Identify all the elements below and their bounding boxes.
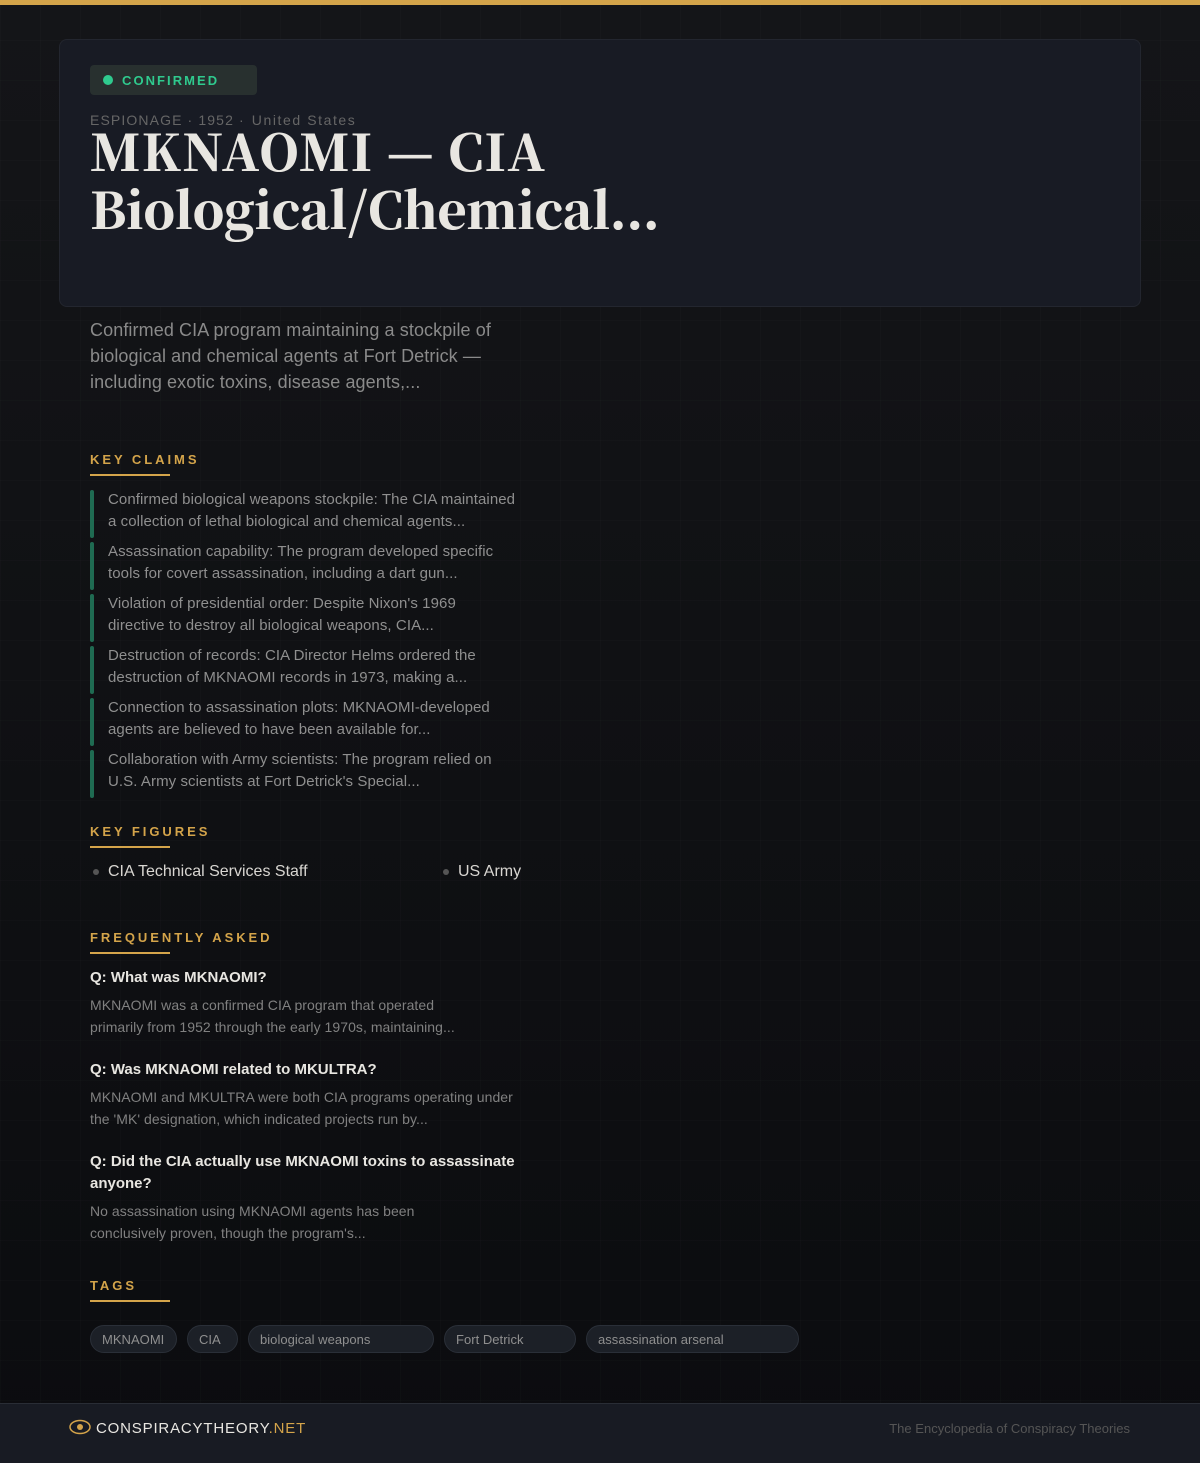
summary text: Confirmed CIA program maintaining a stockpile of [90, 320, 491, 340]
tag: CIA [187, 1325, 238, 1353]
faq 2 answer [90, 1089, 513, 1127]
category line: ESPIONAGE · 1952 · United States [90, 112, 356, 128]
faq 3 question: Q: Did the CIA actually use MKNAOMI toxins to assassinate [90, 1153, 515, 1170]
faq 2 answer: MKNAOMI and MKULTRA were both CIA programs operating under [90, 1089, 513, 1105]
summary text: including exotic toxins, disease agents,... [90, 372, 420, 392]
title: Biological/Chemical... [90, 172, 659, 244]
tag: Fort Detrick [444, 1325, 576, 1353]
claim 3 [90, 594, 456, 642]
faq 3 answer [90, 1203, 414, 1241]
claim 2 [90, 542, 493, 590]
tag: biological weapons: biological weapons [260, 1332, 370, 1347]
heading: key figures: KEY FIGURES [90, 824, 210, 839]
footer tagline: The Encyclopedia of Conspiracy Theories [889, 1421, 1130, 1436]
claim 4 [90, 646, 476, 694]
summary text [90, 320, 491, 392]
tag: MKNAOMI [90, 1325, 177, 1353]
badge: confirmed [90, 65, 257, 95]
tag: Fort Detrick: Fort Detrick [456, 1332, 524, 1347]
claim 6: Collaboration with Army scientists: The program relied on [108, 751, 492, 768]
tag: MKNAOMI: MKNAOMI [102, 1332, 164, 1347]
tag: biological weapons [248, 1325, 434, 1353]
panel: header card [59, 39, 1141, 307]
faq 1 answer: MKNAOMI was a confirmed CIA program that operated [90, 997, 434, 1013]
claim 5 [90, 698, 490, 746]
claim 1: Confirmed biological weapons stockpile: The CIA maintained [108, 491, 515, 508]
faq 3 answer: conclusively proven, though the program's... [90, 1225, 366, 1241]
claim 5: Connection to assassination plots: MKNAOMI-developed [108, 699, 490, 716]
claim 4: Destruction of records: CIA Director Helms ordered the [108, 647, 476, 664]
badge dot [103, 75, 113, 85]
top accent bar [0, 0, 1200, 5]
claim 5: agents are believed to have been available for... [108, 721, 430, 738]
title [90, 114, 659, 244]
faq 1 answer: primarily from 1952 through the early 1970s, maintaining... [90, 1019, 455, 1035]
claim 3: Violation of presidential order: Despite Nixon's 1969 [108, 595, 456, 612]
faq 1 question: Q: What was MKNAOMI? [90, 969, 267, 986]
claim 6 [90, 750, 492, 798]
faq 3 question [90, 1153, 515, 1192]
title: MKNAOMI — CIA [90, 114, 546, 186]
icon: eye logo [69, 1420, 91, 1434]
badge label: CONFIRMED [122, 73, 219, 88]
claim 6: U.S. Army scientists at Fort Detrick's Special... [108, 773, 420, 790]
heading: tags: TAGS [90, 1278, 137, 1293]
claim 4: destruction of MKNAOMI records in 1973, making a... [108, 669, 467, 686]
figure: CIA Technical Services Staff: CIA Technical Services Staff [108, 863, 308, 880]
faq 2 answer: the 'MK' designation, which indicated projects run by... [90, 1111, 428, 1127]
faq 2 question: Q: Was MKNAOMI related to MKULTRA? [90, 1061, 377, 1078]
tag: assassination arsenal [586, 1325, 799, 1353]
faq 1 answer [90, 997, 455, 1035]
claim 1 [90, 490, 515, 538]
claim 2: tools for covert assassination, including a dart gun... [108, 565, 458, 582]
figure: US Army: US Army [458, 863, 521, 880]
faq 3 question: anyone? [90, 1175, 152, 1192]
claim 2: Assassination capability: The program developed specific [108, 543, 493, 560]
tag: CIA: CIA [199, 1332, 221, 1347]
heading: key claims: KEY CLAIMS [90, 452, 199, 467]
claim 3: directive to destroy all biological weapons, CIA... [108, 617, 434, 634]
summary text: biological and chemical agents at Fort Detrick — [90, 346, 481, 366]
faq 3 answer: No assassination using MKNAOMI agents has been [90, 1203, 414, 1219]
logo wordmark: CONSPIRACYTHEORY.NET [96, 1420, 306, 1437]
tag: assassination arsenal: assassination arsenal [598, 1332, 724, 1347]
heading: frequently asked: FREQUENTLY ASKED [90, 930, 273, 945]
footer [0, 1403, 1200, 1463]
claim 1: a collection of lethal biological and chemical agents... [108, 513, 465, 530]
